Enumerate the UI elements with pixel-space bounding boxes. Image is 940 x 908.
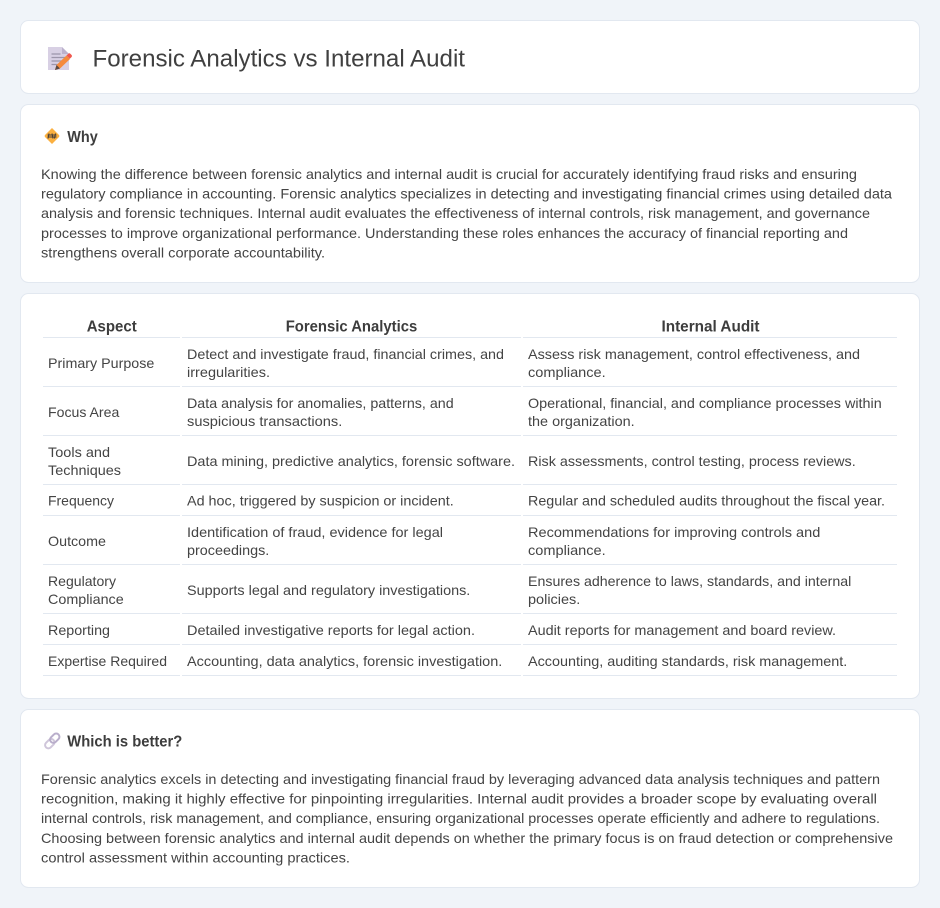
row: frequency: Regular and scheduled audits throughout the fiscal year. xyxy=(528,492,885,508)
row: primary purpose: Detect and investigate fraud, financial crimes, and xyxy=(187,346,504,362)
text block: which is better paragraph: Choosing between forensic analytics and internal audit depends on whether the primary focus is on fraud detection or comprehensive xyxy=(41,830,893,846)
table header row: Internal Audit xyxy=(662,318,760,336)
text block: which is better paragraph: recognition, making it highly effective for pinpointing irregularities. Internal audit provides a broader scope by evaluating overall xyxy=(41,791,877,807)
text block: why paragraph: processes to improve organizational performance. Understanding these roles enhances the accuracy of financial reporting and xyxy=(41,225,848,241)
row: expertise required: Accounting, data analytics, forensic investigation. xyxy=(187,653,502,669)
row: tools and techniques: Data mining, predictive analytics, forensic software. xyxy=(187,453,515,469)
row: tools and techniques: Techniques xyxy=(48,462,121,478)
heading: which is better: Which is better? xyxy=(67,734,182,751)
row: outcome: compliance. xyxy=(528,542,606,558)
panel: comparison table xyxy=(20,294,920,698)
table rules xyxy=(43,337,897,676)
row: primary purpose: Primary Purpose xyxy=(48,355,155,371)
row: regulatory compliance: Regulatory xyxy=(48,573,116,589)
row: frequency xyxy=(48,492,885,508)
title: Forensic Analytics vs Internal Audit xyxy=(92,46,465,73)
panel: why xyxy=(20,104,920,282)
row: focus area: suspicious transactions. xyxy=(187,413,342,429)
row: primary purpose: Assess risk management, control effectiveness, and xyxy=(528,346,860,362)
icon: memo with pencil xyxy=(48,47,72,70)
icon: orange diamond sign xyxy=(45,128,59,144)
row: primary purpose: irregularities. xyxy=(187,364,270,380)
icon: link xyxy=(44,732,61,750)
row: outcome: Identification of fraud, evidence for legal xyxy=(187,524,443,540)
row: regulatory compliance: Ensures adherence to laws, standards, and internal xyxy=(528,573,851,589)
row: primary purpose xyxy=(48,346,860,380)
row: focus area: the organization. xyxy=(528,413,635,429)
row: tools and techniques: Tools and xyxy=(48,444,110,460)
row: outcome: Outcome xyxy=(48,533,106,549)
row: frequency: Ad hoc, triggered by suspicion or incident. xyxy=(187,492,454,508)
row: reporting: Reporting xyxy=(48,622,110,638)
text block: why paragraph: strengthens overall corporate accountability. xyxy=(41,244,325,260)
row: outcome: Recommendations for improving controls and xyxy=(528,524,820,540)
table header row xyxy=(87,318,760,336)
row: expertise required: Accounting, auditing standards, risk management. xyxy=(528,653,847,669)
row: focus area: Data analysis for anomalies, patterns, and xyxy=(187,395,454,411)
text block: why paragraph: Knowing the difference between forensic analytics and internal audit is crucial for accurately identifying fraud risks and ensuring xyxy=(41,166,857,182)
row: primary purpose: compliance. xyxy=(528,364,606,380)
text block: why paragraph: regulatory compliance in accounting. Forensic analytics specializes in detecting and investigating financial crimes using detailed data xyxy=(41,186,892,202)
text block: which is better paragraph: control assessment within accounting practices. xyxy=(41,849,350,865)
row: focus area: Operational, financial, and compliance processes within xyxy=(528,395,882,411)
text block: which is better paragraph xyxy=(41,771,893,865)
row: regulatory compliance: Compliance xyxy=(48,591,124,607)
row: expertise required: Expertise Required xyxy=(48,653,167,669)
row: expertise required xyxy=(48,653,847,669)
row: reporting: Detailed investigative reports for legal action. xyxy=(187,622,475,638)
row: regulatory compliance xyxy=(48,573,851,607)
row: regulatory compliance: Supports legal and regulatory investigations. xyxy=(187,582,470,598)
table header row: Aspect xyxy=(87,318,137,336)
text block: which is better paragraph: Forensic analytics excels in detecting and investigating financial fraud by leveraging advanced data analysis techniques and pattern xyxy=(41,771,880,787)
text block: which is better paragraph: internal controls, risk management, and compliance, ensuring organizational processes operate efficiently and adhere to regulations. xyxy=(41,810,880,826)
row: frequency: Frequency xyxy=(48,492,114,508)
row: tools and techniques xyxy=(48,444,856,478)
row: reporting: Audit reports for management and board review. xyxy=(528,622,836,638)
row: outcome xyxy=(48,524,820,558)
row: regulatory compliance: policies. xyxy=(528,591,580,607)
table header row: Forensic Analytics xyxy=(286,318,417,336)
row: outcome: proceedings. xyxy=(187,542,269,558)
panel: which is better xyxy=(20,710,920,888)
heading: why: Why xyxy=(67,129,98,146)
text block: why paragraph: analysis and forensic techniques. Internal audit evaluates the effectiveness of internal controls, risk management, and governance xyxy=(41,205,870,221)
row: reporting xyxy=(48,622,836,638)
row: focus area xyxy=(48,395,882,429)
row: tools and techniques: Risk assessments, control testing, process reviews. xyxy=(528,453,856,469)
row: focus area: Focus Area xyxy=(48,404,120,420)
text block: why paragraph xyxy=(41,166,892,260)
panel: title header xyxy=(20,20,920,94)
